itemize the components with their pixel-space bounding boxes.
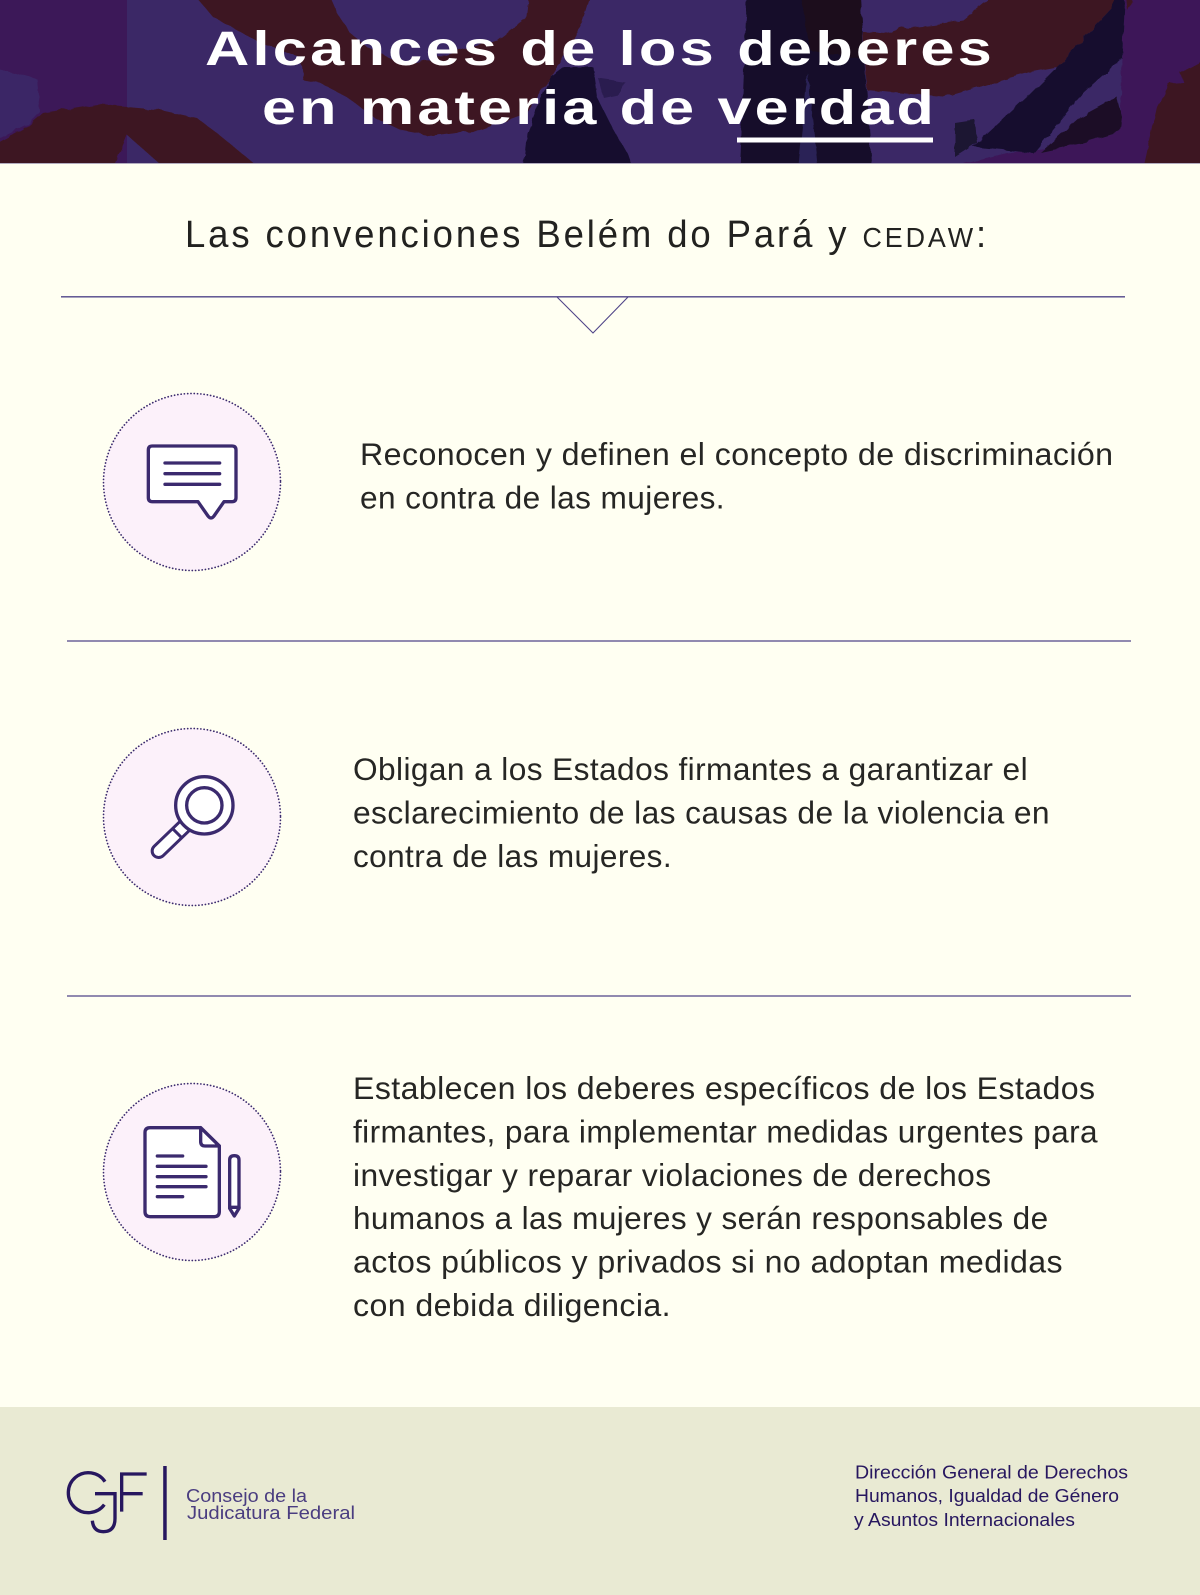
text: establecen: con debida diligencia.	[353, 1287, 671, 1323]
text: establecen: actos públicos y privados si no adoptan medidas	[353, 1244, 1063, 1280]
divider with downward triangle	[61, 297, 1125, 333]
logo: CJF	[68, 1466, 355, 1540]
footer text: directorate: Dirección General de Derechos	[855, 1461, 1128, 1482]
title: en materia de verdad	[262, 82, 937, 135]
text: reconocen: Reconocen y definen el concepto de discriminación	[360, 436, 1114, 472]
footer text: directorate: y Asuntos Internacionales	[854, 1509, 1075, 1530]
text: reconocen	[360, 436, 1114, 515]
logo: CJF: Judicatura Federal	[187, 1503, 355, 1523]
text: establecen: humanos a las mujeres y serán responsables de	[353, 1200, 1048, 1236]
logo: CJF: Consejo de la	[186, 1486, 308, 1506]
subtitle: Las convenciones Belém do Pará y CEDAW:	[185, 214, 989, 256]
footer band	[0, 1407, 1200, 1595]
text: obligan: Obligan a los Estados firmantes a garantizar el	[353, 751, 1028, 787]
text: establecen: investigar y reparar violaciones de derechos	[353, 1157, 991, 1193]
title: Alcances de los deberes	[205, 23, 995, 76]
text: establecen: firmantes, para implementar medidas urgentes para	[353, 1113, 1098, 1149]
footer text: directorate	[854, 1461, 1128, 1530]
panel: item 1	[104, 394, 1114, 570]
text: obligan	[353, 751, 1050, 874]
icon: speech bubble	[104, 394, 280, 570]
panel: item 2	[104, 728, 1050, 906]
text: establecen: Establecen los deberes específicos de los Estados	[353, 1070, 1096, 1106]
title	[205, 23, 995, 142]
text: establecen	[353, 1070, 1098, 1323]
header banner	[0, 0, 1200, 170]
footer text: directorate: Humanos, Igualdad de Género	[855, 1485, 1119, 1506]
panel: item 3	[104, 1070, 1098, 1323]
icon: document and pencil	[104, 1084, 280, 1260]
text: obligan: contra de las mujeres.	[353, 838, 672, 874]
icon: magnifying glass	[104, 728, 280, 906]
text: reconocen: en contra de las mujeres.	[360, 479, 725, 515]
text: obligan: esclarecimiento de las causas de la violencia en	[353, 794, 1050, 830]
